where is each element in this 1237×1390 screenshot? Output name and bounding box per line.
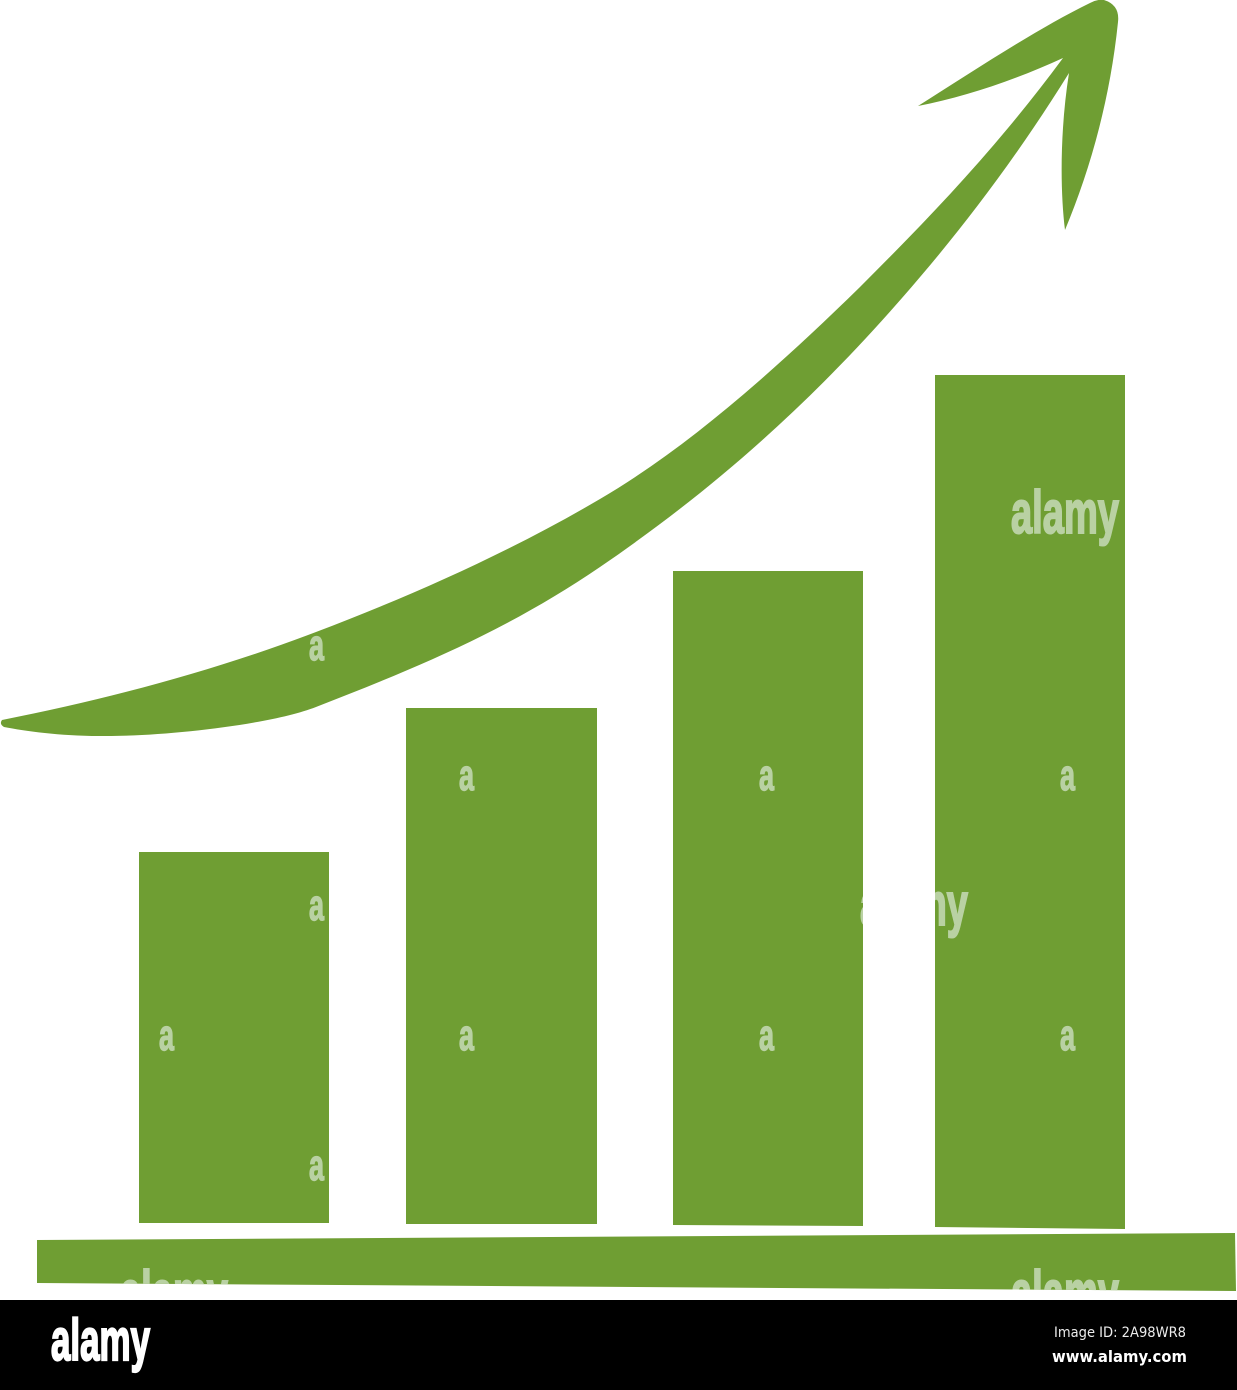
watermarks: a — [759, 1011, 774, 1060]
footer band — [0, 1300, 1237, 1390]
watermarks: alamy — [120, 1259, 228, 1326]
watermarks: alamy — [1011, 1259, 1119, 1326]
watermarks: a — [309, 1141, 324, 1190]
bar 4 — [935, 375, 1125, 1229]
watermarks: alamy — [1011, 479, 1119, 546]
website: www.alamy.com — [1052, 1347, 1187, 1366]
image id: Image ID: 2A98WR8 — [1054, 1325, 1186, 1341]
watermarks: a — [759, 751, 774, 800]
watermarks: alamy — [860, 871, 968, 938]
watermarks: a — [459, 1011, 474, 1060]
watermarks: a — [159, 1011, 174, 1060]
watermarks: a — [309, 621, 324, 670]
watermarks — [120, 479, 1119, 1326]
watermarks: a — [309, 881, 324, 930]
bar 1 — [139, 852, 329, 1223]
bar chart — [37, 375, 1236, 1291]
bar 3 — [673, 571, 863, 1226]
footer logo: alamy — [51, 1308, 150, 1373]
watermarks: a — [1060, 751, 1075, 800]
watermarks: a — [1060, 1011, 1075, 1060]
arrow: rising growth curve — [1, 0, 1118, 736]
watermarks: a — [459, 751, 474, 800]
baseline bar — [37, 1233, 1236, 1291]
bar 2 — [406, 708, 597, 1224]
